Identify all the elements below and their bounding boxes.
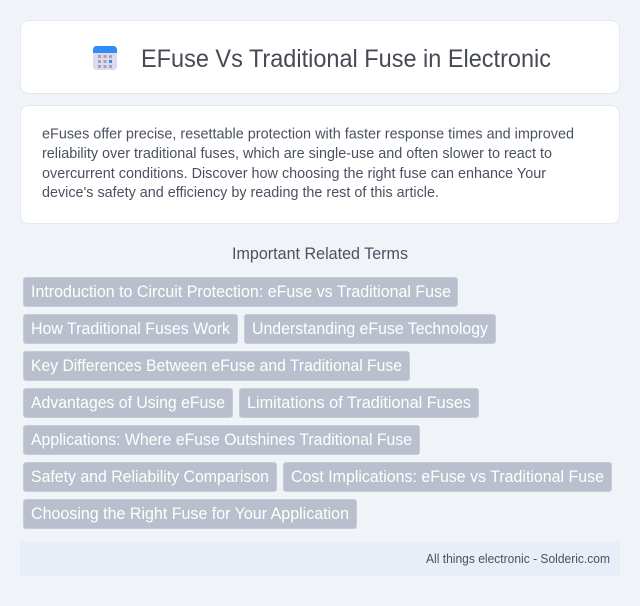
heading: important related terms: Important Related Terms bbox=[232, 245, 408, 263]
tag: how traditional fuses work bbox=[24, 314, 238, 344]
tag: advantages bbox=[24, 388, 232, 418]
text block: introduction bbox=[42, 126, 574, 201]
title: EFuse Vs Traditional Fuse in Electronic bbox=[141, 45, 551, 73]
footer bbox=[20, 542, 620, 576]
text block: introduction: device's safety and efficiency by reading the rest of this article. bbox=[42, 184, 439, 201]
tag list bbox=[24, 278, 612, 528]
panel: title header bbox=[20, 20, 620, 94]
text block: introduction: reliability over traditional fuses, which are single-use and often slower to react to bbox=[42, 145, 552, 162]
tag: limitations bbox=[240, 388, 478, 418]
tag: key differences bbox=[24, 352, 410, 380]
tag: how traditional fuses work: How Traditional Fuses Work bbox=[31, 320, 231, 338]
tag: safety and reliability: Safety and Reliability Comparison bbox=[31, 468, 269, 486]
tag: advantages: Advantages of Using eFuse bbox=[31, 394, 225, 412]
tag: choosing the right fuse: Choosing the Right Fuse for Your Application bbox=[31, 505, 349, 523]
tag: introduction bbox=[24, 278, 458, 306]
text block: introduction: overcurrent conditions. Discover how choosing the right fuse can enhance Your bbox=[42, 165, 546, 182]
panel: introduction text bbox=[20, 106, 620, 224]
tag: key differences: Key Differences Between eFuse and Traditional Fuse bbox=[31, 357, 402, 375]
tag: introduction: Introduction to Circuit Protection: eFuse vs Traditional Fuse bbox=[31, 283, 451, 301]
tag: applications bbox=[24, 426, 420, 454]
footer: All things electronic - Solderic.com bbox=[426, 552, 610, 566]
tag: applications: Applications: Where eFuse Outshines Traditional Fuse bbox=[31, 431, 412, 449]
text block: introduction: eFuses offer precise, resettable protection with faster response times and improved bbox=[42, 126, 574, 142]
tag: cost implications bbox=[284, 462, 612, 492]
tag: choosing the right fuse bbox=[24, 500, 356, 528]
tag: safety and reliability bbox=[24, 462, 276, 492]
tag: understanding efuse bbox=[244, 314, 496, 344]
tag: understanding efuse: Understanding eFuse Technology bbox=[252, 320, 489, 338]
icon: calendar bbox=[93, 46, 117, 70]
tag: limitations: Limitations of Traditional Fuses bbox=[247, 394, 471, 412]
tag: cost implications: Cost Implications: eFuse vs Traditional Fuse bbox=[291, 468, 604, 486]
